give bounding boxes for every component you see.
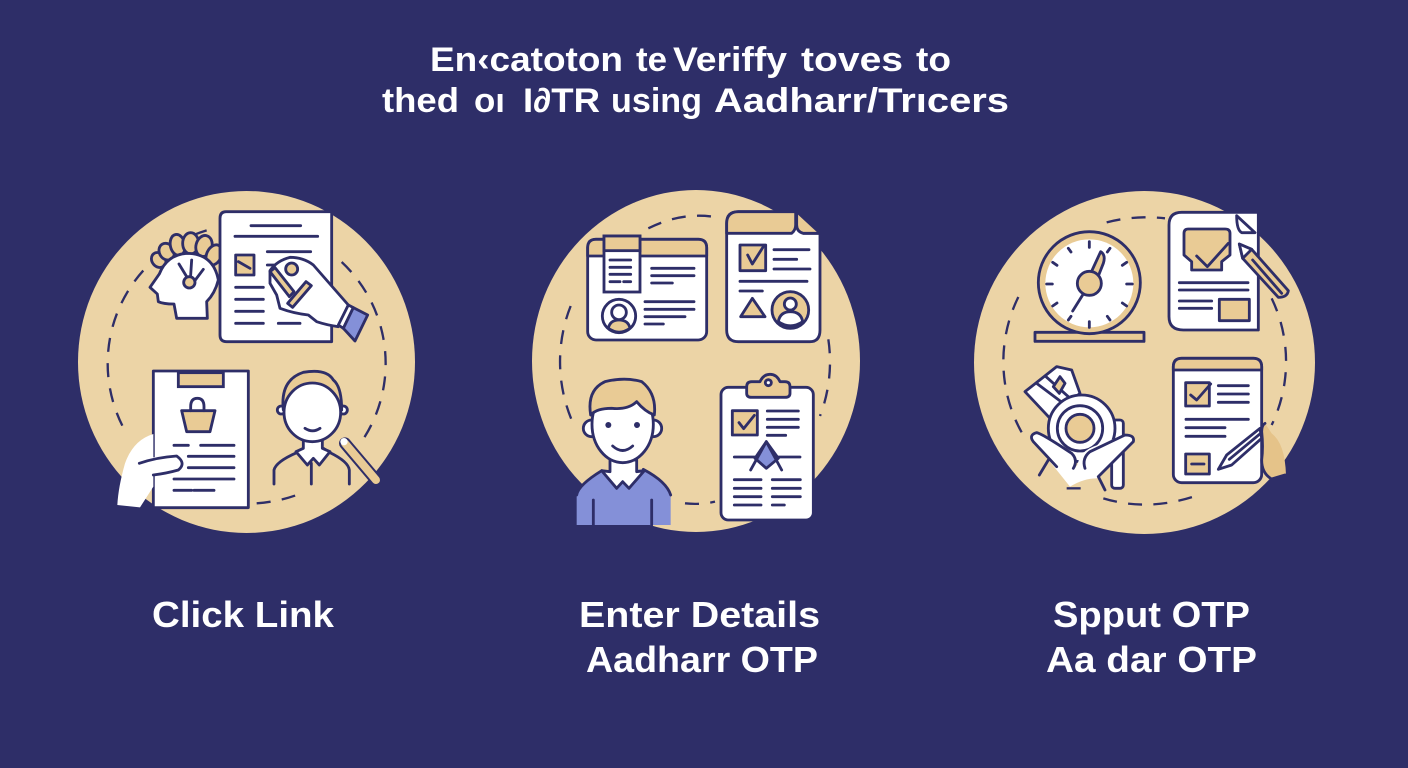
title: using xyxy=(611,82,702,120)
step 1 circle xyxy=(78,191,415,533)
label: enter details: Enter Details xyxy=(579,594,820,635)
label: input OTP: Spput OTP xyxy=(1053,594,1250,635)
panel: step 1 click link xyxy=(78,191,415,533)
label: click link: Click Link xyxy=(152,594,335,635)
title: Aadharr/Trıcers xyxy=(714,82,1009,120)
dashed ring xyxy=(1003,217,1286,505)
title: En‹catoton xyxy=(430,41,623,79)
label: input OTP: Aa dar OTP xyxy=(1046,639,1257,680)
clipboard with checklist xyxy=(721,374,813,520)
pencil xyxy=(340,438,383,488)
step 2 illustration xyxy=(560,212,830,525)
title: thed xyxy=(382,82,459,120)
label: input OTP xyxy=(1046,594,1257,680)
panel: step 2 enter details xyxy=(532,190,860,532)
step 3 illustration xyxy=(1003,212,1288,505)
clipboard with bag and hand xyxy=(117,371,248,508)
label: enter details xyxy=(579,594,820,680)
title xyxy=(382,41,1009,120)
step 2 circle xyxy=(532,190,860,532)
document with checkbox and avatar xyxy=(727,212,820,342)
icon: head with ideas xyxy=(148,233,225,318)
title: I∂TR xyxy=(523,82,600,120)
hands holding disc and card xyxy=(1025,367,1134,490)
title: toves xyxy=(801,41,903,79)
title: te xyxy=(636,41,667,79)
checklist with pencil and hand xyxy=(1173,358,1286,483)
step 1 illustration xyxy=(108,212,386,508)
icon: clock xyxy=(1035,232,1144,341)
document with stamp hand xyxy=(220,212,368,342)
title: to xyxy=(916,41,951,79)
person with pencil xyxy=(274,371,383,488)
document with pencil xyxy=(1169,212,1288,330)
step 3 circle xyxy=(974,191,1315,534)
ID card with avatar xyxy=(588,236,707,340)
panel: step 3 input OTP xyxy=(974,191,1315,534)
title: Veriffy xyxy=(673,41,787,79)
title: oı xyxy=(474,82,505,120)
label: enter details: Aadharr OTP xyxy=(586,639,818,680)
dashed ring xyxy=(108,230,386,503)
dashed ring xyxy=(560,216,830,504)
person in blue sweater xyxy=(577,379,671,525)
